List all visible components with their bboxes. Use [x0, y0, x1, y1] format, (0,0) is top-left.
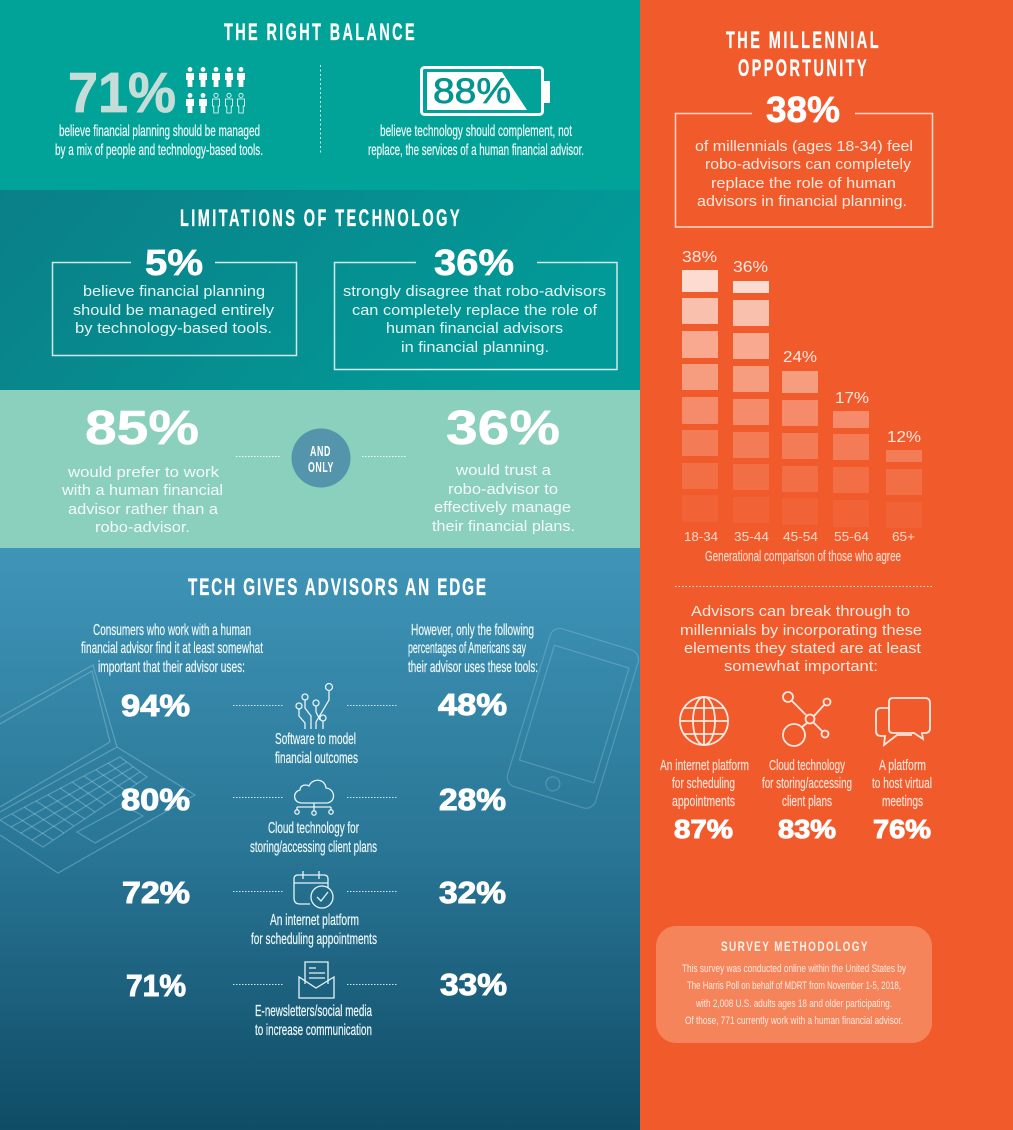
column: virtual meetings: to host virtual [872, 775, 932, 792]
text: complement not replace: replace, the services of a human financial advisor. [368, 142, 584, 159]
axis labels: 45-54 [783, 530, 818, 544]
row: newsletters: E-newsletters/social media [255, 1003, 372, 1020]
row: newsletters: to increase communication [255, 1022, 372, 1039]
callout: 5%: believe financial planning [83, 283, 265, 300]
stat: 85%: 85% [85, 402, 199, 455]
column: virtual meetings: A platform [879, 757, 926, 774]
illustration: phone outline [505, 626, 641, 811]
bar values: 24% [783, 349, 817, 366]
text: right intro: their advisor uses these tools: [408, 659, 538, 676]
text: prefer human: with a human financial [61, 482, 223, 499]
row: scheduling: for scheduling appointments [251, 931, 377, 948]
text: right intro [408, 622, 538, 676]
badge: and only: ONLY [308, 460, 334, 476]
text: mix of people and technology: by a mix of people and technology-based tools. [55, 142, 263, 159]
text: trust robo: their financial plans. [432, 518, 575, 535]
heading: the millennial opportunity: THE MILLENNIAL [726, 27, 881, 54]
column: cloud technology: client plans [782, 793, 832, 810]
bar: 65+ [886, 450, 922, 528]
heading: limitations of technology: LIMITATIONS OF TECHNOLOGY [180, 205, 462, 232]
axis labels: 35-44 [734, 530, 769, 544]
callout: 5%: should be managed entirely [73, 302, 275, 319]
column: cloud technology: 83% [778, 814, 836, 844]
panel: the right balance [0, 0, 640, 190]
text: trust robo: would trust a [455, 462, 552, 479]
column: internet platform: An internet platform [660, 757, 749, 774]
callout: 36%: 36% [434, 242, 514, 283]
callout: 5% [52, 242, 296, 356]
column: internet platform: appointments [672, 793, 735, 810]
chart caption: Generational comparison of those who agree [705, 548, 901, 565]
icon: network [783, 692, 830, 746]
row: cloud: 28% [439, 782, 506, 817]
callout: 5%: by technology-based tools. [75, 320, 272, 337]
text: mix of people and technology [55, 123, 263, 159]
text: left intro: important that their advisor uses: [98, 659, 245, 676]
panel: the millennial opportunity [640, 0, 1013, 1130]
icon: calendar [294, 871, 333, 908]
icon: circuit [296, 684, 332, 729]
callout: 38%: replace the role of human [711, 175, 896, 192]
text: complement not replace: believe technology should complement, not [380, 123, 572, 140]
callout: 38%: of millennials (ages 18-34) feel [695, 138, 913, 155]
panel: survey methodology: This survey was conducted online within the United States by [682, 963, 906, 975]
bar values: 36% [733, 259, 768, 276]
icon: chat bubbles [876, 698, 930, 745]
callout: 36%: can completely replace the role of [352, 302, 598, 319]
heading: the millennial opportunity [726, 27, 881, 82]
panel: survey methodology [656, 926, 932, 1043]
row: newsletters [126, 962, 507, 1039]
text: advisors can break through: elements they stated are at least [684, 640, 922, 657]
column: virtual meetings: meetings [882, 793, 923, 810]
axis labels [684, 530, 915, 544]
badge: and only: AND [310, 444, 331, 460]
stat: 71%: 71% [68, 61, 176, 125]
column: internet platform [660, 697, 749, 844]
callout: 38%: 38% [766, 89, 840, 130]
column: internet platform: for scheduling [672, 775, 735, 792]
callout: 38%: advisors in financial planning. [697, 193, 907, 210]
column: virtual meetings: 76% [873, 814, 931, 844]
text: trust robo: effectively manage [434, 499, 571, 516]
bar values: 38% [682, 249, 717, 266]
row: software: financial outcomes [275, 750, 358, 767]
row: software: Software to model [275, 731, 356, 748]
illustration: laptop outline [0, 665, 195, 873]
row: software: 48% [438, 687, 507, 722]
axis labels: 18-34 [684, 530, 718, 544]
icon: globe [680, 697, 728, 745]
text: trust robo [432, 462, 575, 535]
bar: 55-64 [833, 411, 869, 527]
callout: 38%: robo-advisors can completely [705, 156, 912, 173]
icon: battery 88%: 88% [433, 72, 511, 111]
bar chart: generational comparison [682, 249, 922, 565]
callout: 36%: human financial advisors [386, 320, 563, 337]
icon: people [186, 67, 245, 113]
text: advisors can break through: Advisors can break through to [691, 603, 910, 620]
panel: survey methodology: Of those, 771 currently work with a human financial advisor. [685, 1015, 903, 1027]
column: cloud technology: for storing/accessing [762, 775, 852, 792]
bar values: 12% [887, 429, 921, 446]
text: prefer human [61, 464, 223, 536]
column: virtual meetings [872, 698, 932, 844]
row: newsletters: 71% [126, 968, 186, 1003]
panel: limitations of technology [0, 190, 640, 390]
axis labels: 55-64 [834, 530, 869, 544]
panel: tech gives advisors an edge [0, 548, 641, 1130]
row: software: 94% [121, 688, 190, 723]
row: newsletters: 33% [440, 967, 507, 1002]
text: right intro: percentages of Americans say [408, 640, 526, 657]
text: left intro [81, 622, 263, 676]
row: scheduling: 72% [122, 875, 190, 910]
row: cloud: storing/accessing client plans [250, 839, 377, 856]
heading: the right balance: THE RIGHT BALANCE [224, 19, 417, 46]
icon: envelope [299, 962, 334, 998]
text: prefer human: advisor rather than a [68, 501, 219, 518]
row: cloud: Cloud technology for [268, 820, 359, 837]
text: complement not replace [368, 123, 584, 159]
callout: 36%: strongly disagree that robo-advisors [343, 283, 606, 300]
text: advisors can break through [680, 603, 922, 675]
panel: survey methodology: SURVEY METHODOLOGY [721, 938, 869, 954]
column: cloud technology [762, 692, 852, 844]
text: advisors can break through: somewhat important: [724, 658, 878, 675]
panel: survey methodology: The Harris Poll on behalf of MDRT from November 1-5, 2018, [687, 980, 901, 992]
callout: 36% [334, 242, 617, 370]
callout: 5%: 5% [145, 242, 203, 283]
row: cloud: 80% [121, 782, 190, 817]
callout: 38% [676, 89, 932, 227]
bar values [682, 249, 921, 446]
bar: 45-54 [782, 371, 818, 525]
axis labels: 65+ [892, 530, 915, 544]
text: trust robo: robo-advisor to [448, 481, 558, 498]
row: software [121, 684, 507, 767]
text: advisors can break through: millennials by incorporating these [680, 622, 922, 639]
icon: cloud [295, 780, 334, 815]
heading: the millennial opportunity: OPPORTUNITY [738, 55, 869, 82]
heading: tech gives advisors an edge: TECH GIVES ADVISORS AN EDGE [188, 574, 488, 601]
column: internet platform: 87% [674, 814, 733, 844]
callout: 36%: in financial planning. [401, 339, 549, 356]
bar: 35-44 [733, 281, 769, 523]
text: prefer human: robo-advisor. [95, 519, 190, 536]
column: cloud technology: Cloud technology [769, 757, 845, 774]
badge: and only [292, 428, 350, 488]
panel: survey methodology: with 2,008 U.S. adults ages 18 and older participating. [695, 998, 892, 1010]
stat: 36% trust: 36% [446, 402, 560, 455]
text: left intro: Consumers who work with a human [93, 622, 251, 639]
row: cloud [121, 780, 506, 856]
text: right intro: However, only the following [411, 622, 534, 639]
text: left intro: financial advisor find it at least somewhat [81, 640, 263, 657]
text: mix of people and technology: believe financial planning should be managed [59, 123, 260, 140]
panel: human vs robo [0, 390, 640, 548]
row: scheduling [122, 871, 506, 948]
icon: battery 88% [422, 68, 550, 114]
bar values: 17% [835, 390, 869, 407]
row: scheduling: An internet platform [270, 912, 359, 929]
text: prefer human: would prefer to work [67, 464, 220, 481]
bar: 18-34 [682, 270, 718, 522]
row: scheduling: 32% [439, 875, 506, 910]
